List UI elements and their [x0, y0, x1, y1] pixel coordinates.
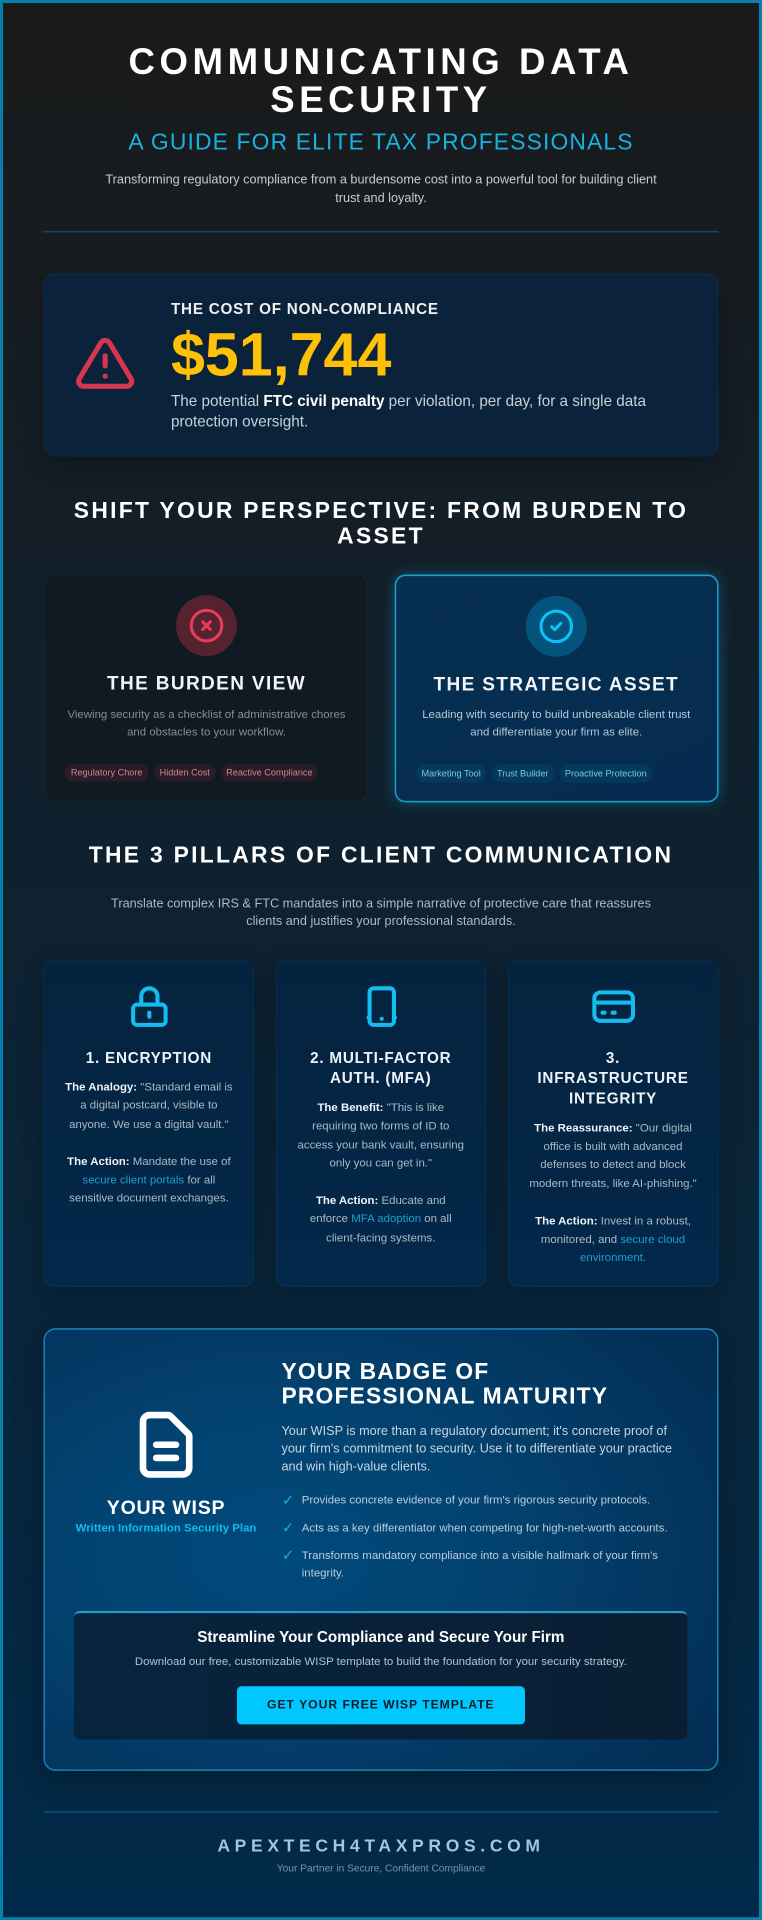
title: [129, 42, 633, 120]
pillar 3 body: environment.: [580, 1251, 646, 1264]
burden title: THE BURDEN VIEW: [107, 673, 306, 694]
penalty figure: $51,744: [171, 321, 391, 389]
panel: your badge of professional maturity: integrity.: [302, 1567, 344, 1580]
subtitle: A GUIDE FOR ELITE TAX PROFESSIONALS: [128, 130, 634, 155]
pillar 2 body: requiring two forms of ID to: [312, 1120, 449, 1132]
pillar 3 title: INFRASTRUCTURE: [537, 1070, 689, 1087]
tags: Trust Builder: [497, 768, 548, 778]
footer tagline: Your Partner in Secure, Confident Compliance: [277, 1862, 485, 1874]
pillar 2 body: [298, 1101, 464, 1244]
pillar 2 body: client-facing systems.: [326, 1231, 435, 1244]
header description: [105, 172, 657, 205]
badge paragraph: [281, 1423, 672, 1473]
badge paragraph: and win high-value clients.: [281, 1459, 430, 1473]
penalty description: protection oversight.: [171, 414, 308, 430]
heading: 3 pillars: THE 3 PILLARS OF CLIENT COMMUNICATION: [89, 843, 673, 868]
tags: Reactive Compliance: [226, 767, 313, 778]
title: COMMUNICATING DATA: [129, 42, 633, 82]
panel: pillar 2 mfa: [276, 961, 486, 1287]
pillar 3 title: 3.: [606, 1050, 620, 1066]
badge heading: PROFESSIONAL MATURITY: [281, 1384, 608, 1409]
tags: [416, 764, 652, 782]
burden description: [67, 708, 346, 738]
footer domain: APEXTECH4TAXPROS.COM: [217, 1836, 545, 1855]
penalty description: The potential FTC civil penalty per violation, per day, for a single data: [171, 393, 646, 410]
asset description: and differentiate your firm as elite.: [470, 726, 642, 739]
header description: trust and loyalty.: [335, 190, 427, 205]
your wisp label: YOUR WISP: [107, 1497, 225, 1519]
heading: shift your perspective: ASSET: [337, 523, 425, 549]
pillar 1 body: The Action: Mandate the use of: [67, 1155, 231, 1168]
pillar 1 body: a digital postcard, visible to: [80, 1099, 218, 1112]
panel: your badge of professional maturity: ✓: [282, 1547, 294, 1563]
cta button: [237, 1686, 525, 1724]
header: [105, 42, 657, 205]
panel: your badge of professional maturity: ✓: [282, 1493, 294, 1509]
pillar 3 body: The Reassurance: "Our digital: [534, 1121, 692, 1134]
pillars description: clients and justifies your professional standards.: [246, 914, 516, 928]
header description: Transforming regulatory compliance from a burdensome cost into a powerful tool for building client: [105, 172, 657, 187]
benefits list: [282, 1493, 668, 1580]
asset description: Leading with security to build unbreakable client trust: [422, 708, 690, 721]
badge paragraph: Your WISP is more than a regulatory document; it's concrete proof of: [281, 1423, 667, 1438]
panel: your badge of professional maturity: [44, 1328, 718, 1771]
pillar 3 body: defenses to detect and block: [540, 1158, 686, 1171]
icon: x circle: [176, 595, 237, 656]
pillar 2 body: enforce MFA adoption on all: [310, 1213, 452, 1225]
footer: [217, 1836, 545, 1874]
pillars description: [111, 896, 651, 928]
cta description: Download our free, customizable WISP template to build the foundation for your security strategy.: [135, 1655, 627, 1668]
panel: the strategic asset: [395, 575, 719, 802]
burden description: Viewing security as a checklist of administrative chores: [67, 708, 346, 720]
pillar 2 body: The Benefit: "This is like: [317, 1101, 444, 1114]
panel: pillar 1 encryption: [44, 961, 254, 1287]
badge heading: YOUR BADGE OF: [281, 1359, 489, 1384]
pillars description: Translate complex IRS & FTC mandates into a simple narrative of protective care that reassures: [111, 896, 651, 911]
icon: document: [140, 1412, 193, 1478]
badge heading: [281, 1359, 608, 1409]
pillar 1 body: anyone. We use a digital vault.": [69, 1118, 229, 1131]
penalty description: [171, 393, 646, 430]
icon: lock: [131, 986, 168, 1027]
pillar 1 title: 1. ENCRYPTION: [86, 1050, 212, 1066]
pillar 1 body: [65, 1081, 233, 1205]
pillar 3 body: [529, 1121, 697, 1264]
tags: [64, 764, 318, 782]
tags: Regulatory Chore: [71, 767, 143, 778]
icon: credit card: [592, 990, 635, 1023]
heading: shift your perspective: SHIFT YOUR PERSPECTIVE: FROM BURDEN TO: [74, 498, 688, 523]
pillar 3 body: modern threats, like AI-phishing.": [529, 1177, 697, 1190]
icon: check circle: [525, 596, 586, 656]
panel: pillar 3 infrastructure: [508, 961, 718, 1287]
cost heading: THE COST OF NON-COMPLIANCE: [171, 301, 439, 318]
pillar 3 title: [537, 1050, 689, 1107]
pillar 2 body: access your bank vault, ensuring: [298, 1138, 464, 1151]
panel: cost of non-compliance: [44, 274, 718, 456]
pillar 2 title: 2. MULTI-FACTOR: [310, 1050, 451, 1066]
pillar 2 title: AUTH. (MFA): [330, 1070, 432, 1087]
cta heading: Streamline Your Compliance and Secure Your Firm: [197, 1629, 564, 1646]
tags: Hidden Cost: [160, 767, 210, 778]
asset description: [422, 708, 690, 739]
pillar 1 body: sensitive document exchanges.: [69, 1192, 229, 1205]
pillar 3 body: office is built with advanced: [544, 1140, 683, 1153]
pillar 3 title: INTEGRITY: [569, 1090, 657, 1107]
panel: the burden view: [44, 574, 367, 802]
tags: Proactive Protection: [565, 768, 647, 778]
panel: your badge of professional maturity: Acts as a key differentiator when competing for high-net-worth accounts.: [302, 1521, 668, 1534]
pillar 2 title: [310, 1050, 451, 1087]
pillar 2 body: only you can get in.": [329, 1157, 432, 1170]
cta button: GET YOUR FREE WISP TEMPLATE: [267, 1698, 495, 1711]
panel: your badge of professional maturity: Provides concrete evidence of your firm's rigorous security protocols.: [302, 1493, 650, 1506]
panel: your badge of professional maturity: Transforms mandatory compliance into a visible hallmark of your firm's: [302, 1549, 658, 1562]
burden description: and obstacles to your workflow.: [127, 725, 286, 738]
icon: warning triangle: [76, 338, 134, 389]
pillar 1 body: secure client portals for all: [82, 1174, 215, 1186]
pillar 3 body: monitored, and secure cloud: [541, 1233, 685, 1246]
asset title: THE STRATEGIC ASSET: [434, 673, 679, 695]
pillar 2 body: The Action: Educate and: [316, 1194, 446, 1207]
icon: mobile device: [366, 986, 397, 1027]
heading: shift your perspective: [74, 498, 688, 549]
panel: your badge of professional maturity: ✓: [282, 1520, 294, 1536]
tags: Marketing Tool: [421, 768, 481, 778]
wisp full name: Written Information Security Plan: [76, 1522, 256, 1535]
badge paragraph: your firm's commitment to security. Use it to differentiate your practice: [281, 1441, 672, 1455]
pillar 1 body: The Analogy: "Standard email is: [65, 1081, 233, 1093]
title: SECURITY: [270, 80, 492, 120]
pillar 3 body: The Action: Invest in a robust,: [535, 1214, 691, 1227]
call to action box: [74, 1611, 687, 1740]
